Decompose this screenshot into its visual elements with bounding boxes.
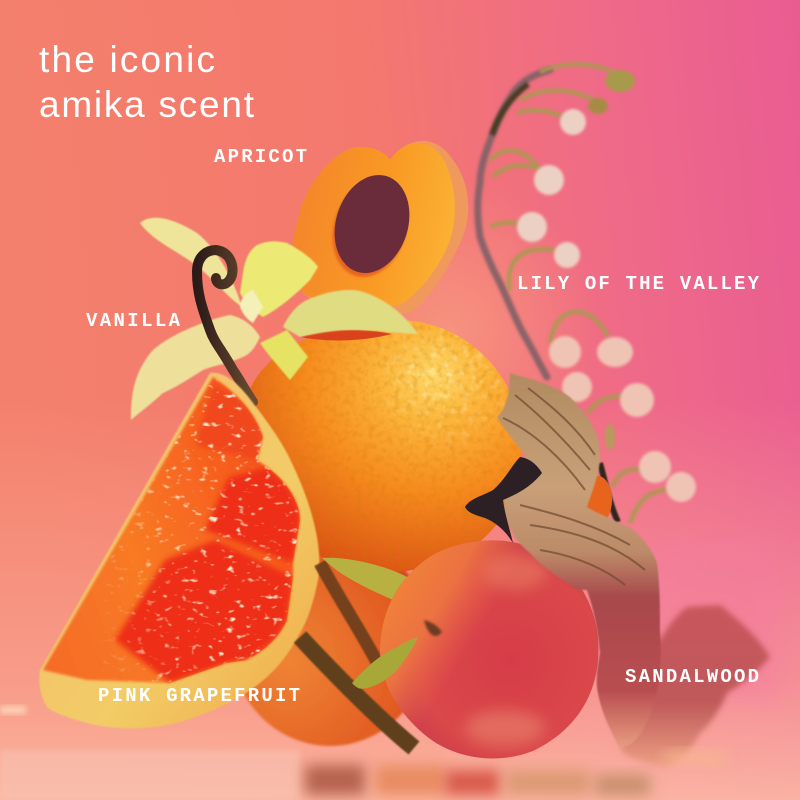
title xyxy=(39,39,255,125)
title: amika scent xyxy=(39,84,255,125)
petal: right xyxy=(283,290,418,337)
peach stem and leaf xyxy=(352,620,442,689)
petal: upper left xyxy=(140,218,242,307)
root body xyxy=(497,373,661,747)
red segments xyxy=(103,379,300,683)
petal: big left xyxy=(131,315,260,420)
apricot pit xyxy=(321,166,421,286)
orange xyxy=(250,320,522,572)
petal: lower xyxy=(260,330,308,380)
label: lily of the valley: LILY OF THE VALLEY xyxy=(517,273,760,295)
petal: center xyxy=(240,241,318,317)
orange patch behind root xyxy=(584,476,612,524)
table reflection xyxy=(0,706,725,800)
petal: small white xyxy=(240,290,263,323)
apricot half xyxy=(292,141,468,315)
lily of the valley xyxy=(478,64,696,523)
title: the iconic xyxy=(39,39,215,80)
whole apricot xyxy=(380,540,598,758)
vanilla flower xyxy=(131,218,418,420)
grapefruit wedge xyxy=(39,370,319,728)
red lip on orange xyxy=(300,330,392,340)
label: vanilla: VANILLA xyxy=(86,310,181,332)
dark knob xyxy=(465,457,542,543)
sandalwood root xyxy=(465,373,770,767)
buds xyxy=(517,70,696,502)
vanilla pod xyxy=(197,250,253,402)
label: pink grapefruit: PINK GRAPEFRUIT xyxy=(98,685,300,707)
lower orange xyxy=(230,534,430,746)
stems and leaves xyxy=(300,558,430,748)
label: sandalwood: SANDALWOOD xyxy=(625,666,759,688)
root lower lump xyxy=(610,605,770,767)
label: apricot: APRICOT xyxy=(214,146,307,168)
